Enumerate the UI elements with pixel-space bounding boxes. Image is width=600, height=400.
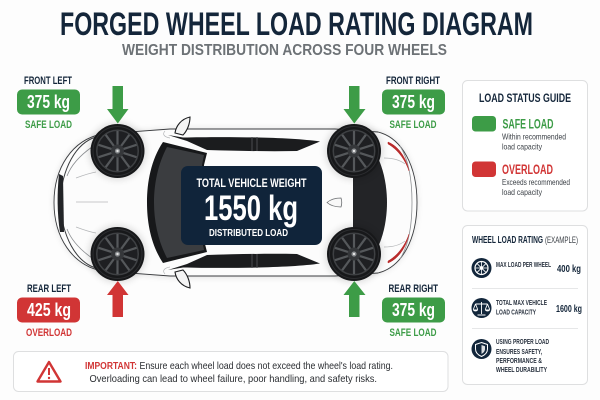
legend: overload: Exceeds recommended [502, 177, 570, 187]
panel: important warning [14, 352, 448, 392]
warning text [85, 360, 393, 385]
row: max load per wheel [496, 260, 581, 275]
note: proper load: USING PROPER LOAD [496, 337, 549, 346]
panel: total vehicle weight [181, 166, 322, 245]
row: total max vehicle load capacity: LOAD CAPACITY [496, 308, 536, 316]
callout: front left: FRONT LEFT [24, 75, 72, 87]
warning text: Overloading can lead to wheel failure, poor handling, and safety risks. [90, 373, 377, 385]
legend: overload: OVERLOAD [502, 162, 553, 177]
row: total max vehicle load capacity: 1600 kg [556, 303, 582, 315]
tail lights [388, 142, 409, 171]
arrow: front left [107, 86, 128, 124]
side windows [168, 135, 320, 151]
panel: total vehicle weight: TOTAL VEHICLE WEIGHT [196, 176, 307, 190]
warning text: IMPORTANT: [85, 360, 137, 372]
panel heading: (EXAMPLE) [545, 235, 578, 245]
windshield [147, 142, 207, 263]
callout: front left: SAFE LOAD [25, 119, 72, 131]
callout: front left [17, 75, 80, 131]
callout: front right: 375 kg [392, 92, 435, 112]
panel: total vehicle weight: 1550 kg [204, 189, 298, 228]
note: proper load: ENSURES SAFETY, [496, 347, 542, 356]
callout: rear left: OVERLOAD [26, 327, 72, 339]
callout: front right: SAFE LOAD [390, 119, 437, 131]
warning text: Ensure each wheel load does not exceed the wheel's load rating. [140, 360, 393, 372]
icon: wheel [472, 258, 492, 278]
panel: wheel load rating [462, 226, 588, 384]
row: total max vehicle load capacity [496, 298, 582, 316]
arrow: rear left [107, 281, 128, 317]
row: max load per wheel: 400 kg [557, 263, 581, 275]
callout: rear right: REAR RIGHT [388, 283, 438, 295]
mirrors [175, 117, 190, 135]
icon: shield [472, 339, 492, 359]
car shadow [54, 129, 417, 277]
panel: total vehicle weight: DISTRIBUTED LOAD [209, 227, 288, 239]
panel: load status guide: LOAD STATUS GUIDE [479, 93, 571, 105]
panel: load status guide [462, 80, 588, 211]
note: proper load [496, 337, 549, 374]
callout: rear right: SAFE LOAD [390, 327, 437, 339]
callout: rear left: REAR LEFT [27, 283, 71, 295]
car top view [54, 117, 417, 288]
car body [54, 129, 417, 276]
callout: front left: 375 kg [27, 92, 70, 112]
row: total max vehicle load capacity: TOTAL MAX VEHICLE [496, 298, 547, 307]
wheel: front left [88, 122, 146, 180]
legend: overload: load capacity [502, 187, 543, 197]
arrow: rear right [344, 281, 366, 317]
legend: overload [472, 162, 570, 197]
panel heading: WHEEL LOAD RATING [472, 235, 543, 246]
subtitle: WEIGHT DISTRIBUTION ACROSS FOUR WHEELS [122, 42, 447, 59]
icon: scales [472, 298, 492, 318]
legend: safe load: Within recommended [502, 132, 566, 142]
note: proper load: WHEEL DURABILITY [496, 365, 547, 374]
callout: front right: FRONT RIGHT [386, 75, 440, 87]
callout: rear left [17, 283, 80, 339]
window pillars [252, 137, 257, 268]
legend: safe load: load capacity [502, 142, 543, 152]
arrow: front right [344, 86, 366, 124]
callout: front right [382, 75, 445, 131]
note: proper load: PERFORMANCE & [496, 356, 542, 365]
callout: rear right: 375 kg [392, 300, 435, 320]
callout: rear left: 425 kg [27, 300, 71, 320]
front grille [58, 174, 64, 232]
fender lines [60, 137, 96, 268]
rear window [353, 158, 387, 247]
wheel: rear left [88, 225, 146, 283]
shark fin antenna [327, 198, 342, 207]
callout: rear right [382, 283, 445, 339]
wheel: front right [325, 122, 383, 180]
legend: safe load [472, 116, 566, 152]
wheel: rear right [325, 225, 383, 283]
icon: warning triangle [38, 362, 60, 382]
legend: safe load: SAFE LOAD [502, 116, 554, 132]
row: max load per wheel: MAX LOAD PER WHEEL [496, 260, 551, 269]
